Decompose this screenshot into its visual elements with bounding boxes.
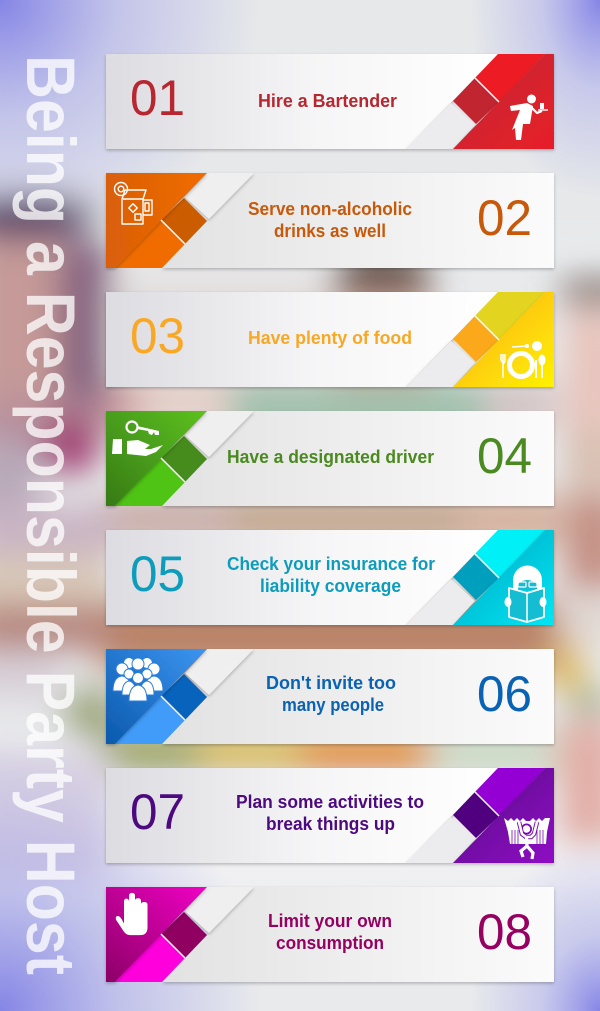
- label: Limit your own consumption: Limit your own: [268, 910, 392, 931]
- panel: step 04: [106, 411, 554, 506]
- icon: raised hand: [116, 893, 148, 935]
- label: Serve non-alcoholic drinks as well: [248, 198, 412, 241]
- icon: dancing crowd: [504, 818, 550, 859]
- panel: step 01: [106, 54, 554, 149]
- label: Plan some activities to break things up: [236, 791, 424, 834]
- icon: plate and cutlery: [501, 341, 546, 378]
- label: Don't invite too many people: [266, 672, 396, 715]
- icon: waiter: [510, 94, 548, 140]
- number 01: 01: [130, 70, 185, 126]
- number 03: 03: [130, 308, 185, 364]
- label: Check your insurance for liability coverage: [227, 553, 435, 596]
- label: Check your insurance for liability coverage: liability coverage: [260, 575, 401, 596]
- number 08: 08: [477, 904, 532, 960]
- icon: crowd of people: [113, 658, 163, 701]
- label: Plan some activities to break things up: Plan some activities to: [236, 791, 424, 812]
- panel: step 06: [106, 649, 554, 744]
- number 04: 04: [477, 428, 532, 484]
- label: Don't invite too many people: Don't invite too: [266, 672, 396, 693]
- panel: step 02: [106, 173, 554, 268]
- panel: step 08: [106, 887, 554, 982]
- label: Have a designated driver: Have a designated driver: [227, 446, 434, 467]
- label: Serve non-alcoholic drinks as well: Serve non-alcoholic: [248, 198, 412, 219]
- icon: key in hand: [112, 422, 163, 456]
- panel: step 07: [106, 768, 554, 863]
- label: Serve non-alcoholic drinks as well: drinks as well: [274, 220, 386, 241]
- label: Check your insurance for liability coverage: Check your insurance for: [227, 553, 435, 574]
- number 06: 06: [477, 666, 532, 722]
- label: Hire a Bartender: Hire a Bartender: [258, 90, 397, 111]
- label: Have plenty of food: Have plenty of food: [248, 327, 412, 348]
- icon: pitcher: [114, 182, 152, 224]
- left figure: [0, 235, 60, 400]
- number 07: 07: [130, 784, 185, 840]
- panel: step 05: [106, 530, 554, 625]
- label: Limit your own consumption: consumption: [276, 932, 384, 953]
- right figure: [562, 280, 600, 304]
- icon: person reading: [504, 566, 546, 622]
- label: Limit your own consumption: [268, 910, 392, 953]
- number 02: 02: [477, 190, 532, 246]
- number 05: 05: [130, 546, 185, 602]
- panel: step 03: [106, 292, 554, 387]
- label: Plan some activities to break things up: break things up: [266, 813, 395, 834]
- label: Don't invite too many people: many people: [282, 694, 384, 715]
